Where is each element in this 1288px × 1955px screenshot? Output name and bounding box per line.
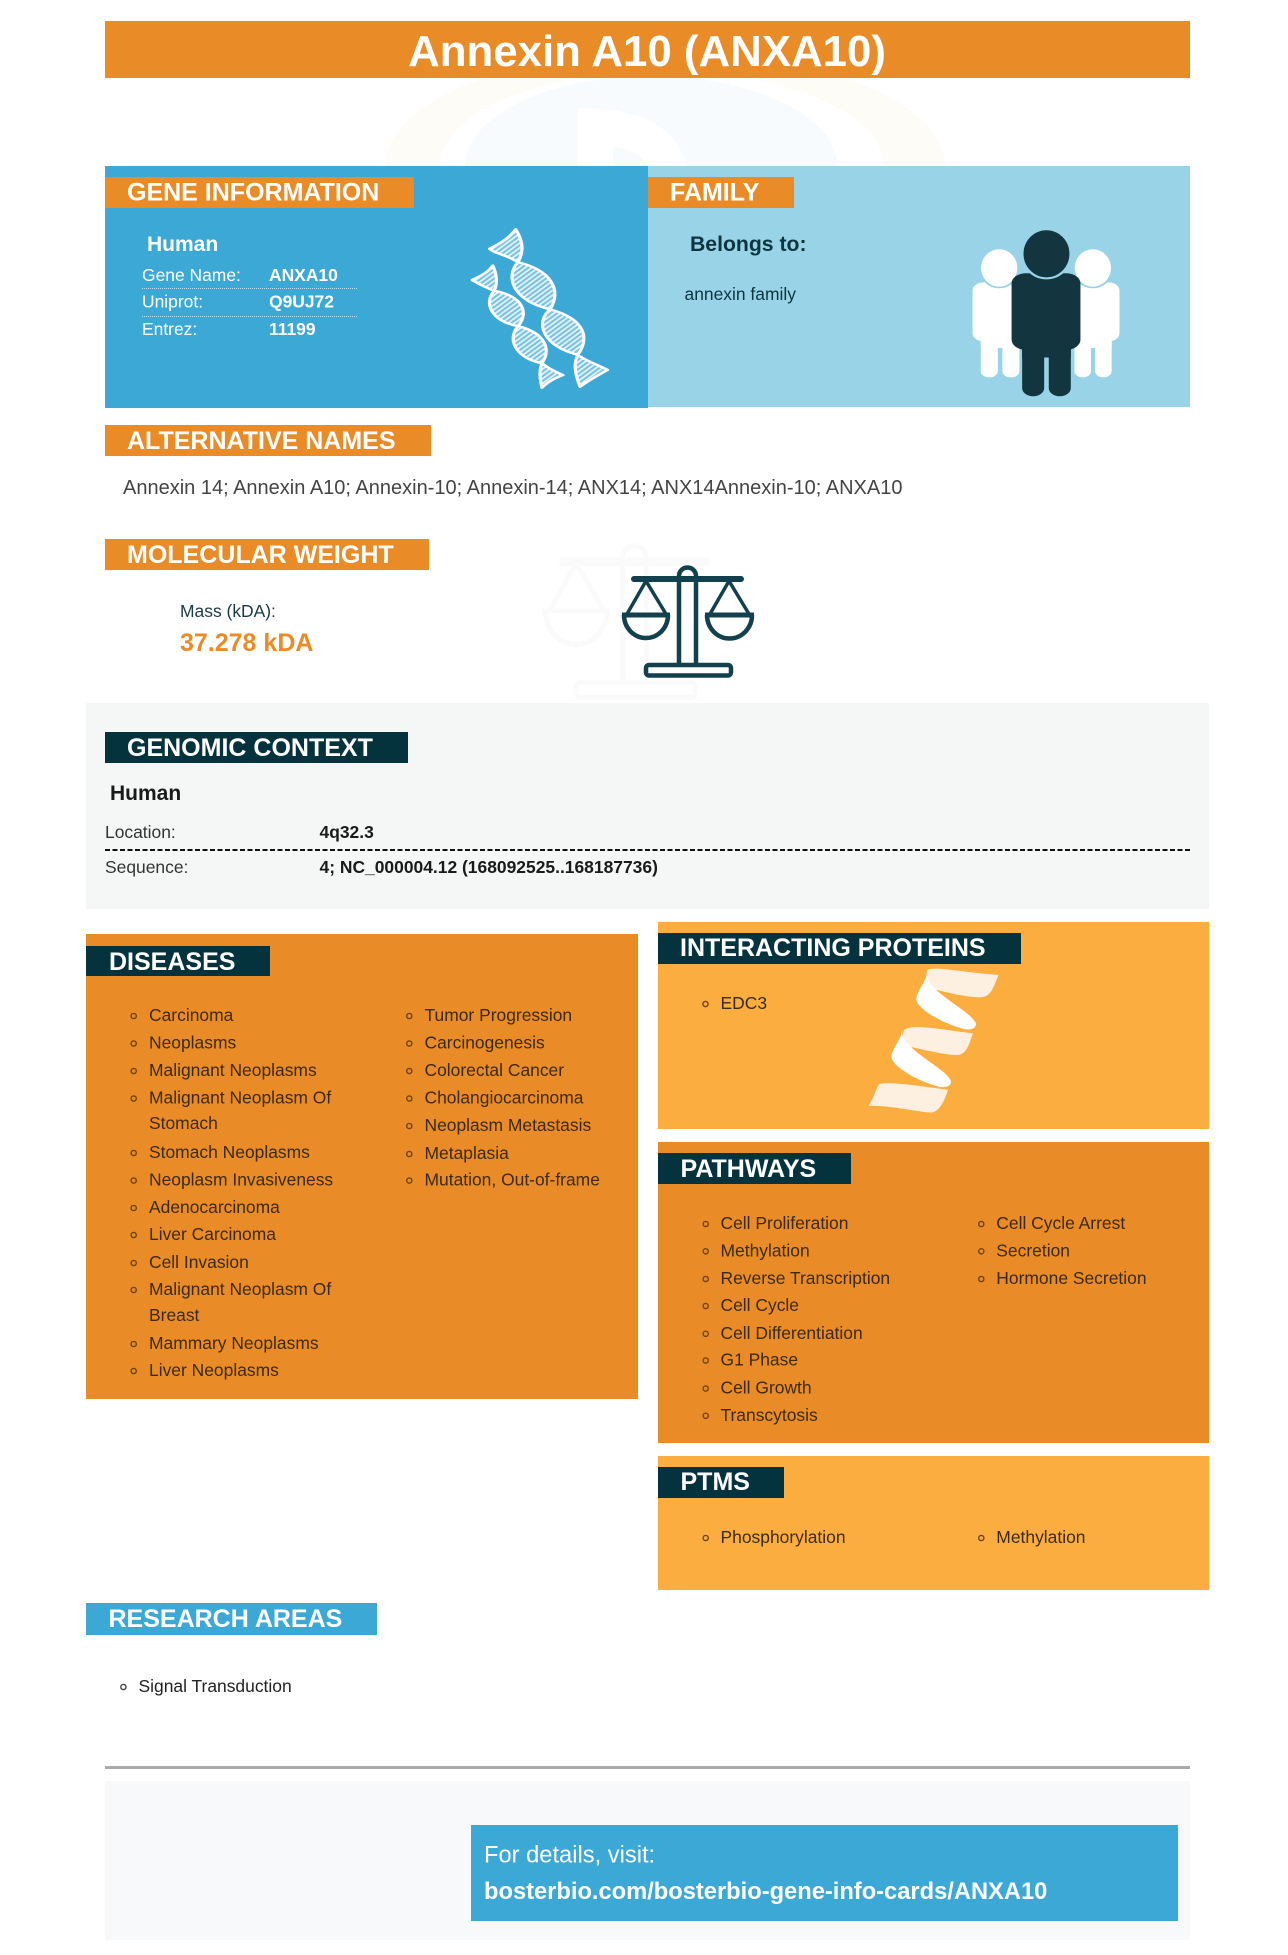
list: diseases column 1: Breast <box>149 1305 200 1325</box>
list: pathways column 1 <box>703 1213 890 1425</box>
panel: footer <box>105 1781 1190 1940</box>
heading: PTMs: PTMS <box>680 1468 750 1496</box>
heading: family <box>648 177 794 208</box>
panel: genomic context <box>86 703 1209 909</box>
gene information rows: Gene Name: <box>142 265 241 285</box>
gene information rows: Q9UJ72 <box>269 292 334 312</box>
list: diseases column 1 <box>131 1005 333 1380</box>
sequence row <box>105 857 658 877</box>
list: research areas: Signal Transduction <box>138 1676 292 1696</box>
list: diseases column 1: Carcinoma <box>149 1005 234 1025</box>
list: pathways column 1: Methylation <box>720 1240 810 1260</box>
location row: Location: <box>105 822 176 842</box>
heading: pathways: PATHWAYS <box>680 1155 816 1183</box>
panel: gene information <box>105 166 648 408</box>
list: pathways column 2: Secretion <box>996 1240 1070 1260</box>
list: diseases column 2 <box>407 1005 600 1190</box>
list: diseases column 2: Tumor Progression <box>424 1005 572 1025</box>
list: diseases column 2: Colorectal Cancer <box>424 1060 564 1080</box>
icon: group of people <box>973 229 1119 396</box>
panel: pathways <box>658 1142 1209 1443</box>
heading: diseases: DISEASES <box>109 948 235 976</box>
title banner <box>105 21 1190 78</box>
list: diseases column 1: Neoplasms <box>149 1032 237 1052</box>
list: pathways column 1: Reverse Transcription <box>720 1268 890 1288</box>
species label: Human <box>147 233 218 256</box>
mass label: Mass (kDA): <box>180 601 276 621</box>
gene information rows: ANXA10 <box>269 265 338 285</box>
callout: details link: For details, visit: <box>484 1842 655 1868</box>
gene information rows: Uniprot: <box>142 292 203 312</box>
list: diseases column 2: Carcinogenesis <box>424 1032 545 1052</box>
panel: family <box>648 166 1190 407</box>
list: pathways column 1: Transcytosis <box>720 1405 818 1425</box>
list: pathways column 1: Cell Differentiation <box>720 1323 863 1343</box>
list: diseases column 2: Mutation, Out-of-frame <box>424 1170 600 1190</box>
icon: protein ribbon <box>868 969 999 1113</box>
heading: family: FAMILY <box>670 178 760 206</box>
gene information rows: Entrez: <box>142 319 197 339</box>
list: pathways column 2 <box>979 1213 1147 1288</box>
heading: interacting proteins: INTERACTING PROTEINS <box>680 934 986 962</box>
list: diseases column 1: Cell Invasion <box>149 1252 249 1272</box>
panel: PTMs <box>658 1456 1209 1590</box>
icon: balance scale <box>622 568 754 676</box>
list: pathways column 1: G1 Phase <box>720 1350 798 1370</box>
icon: faint balance scale watermark <box>543 546 709 698</box>
alternative names text: Annexin 14; Annexin A10; Annexin-10; Annexin-14; ANX14; ANX14Annexin-10; ANXA10 <box>123 477 902 499</box>
list: diseases column 2: Neoplasm Metastasis <box>424 1115 591 1135</box>
list: PTMs column 1: Phosphorylation <box>720 1527 846 1547</box>
list: pathways column 1: Cell Growth <box>720 1378 812 1398</box>
list: diseases column 2: Metaplasia <box>424 1143 509 1163</box>
panel: diseases <box>86 934 638 1399</box>
list: diseases column 1: Malignant Neoplasm Of <box>149 1088 331 1108</box>
heading: diseases <box>86 946 270 976</box>
panel: interacting proteins <box>658 922 1209 1129</box>
gene information rows <box>142 265 357 339</box>
callout: details link <box>471 1825 1178 1921</box>
list: diseases column 1: Adenocarcinoma <box>149 1197 280 1217</box>
list: pathways column 1: Cell Cycle <box>720 1295 799 1315</box>
species label: Human <box>110 782 181 805</box>
list: diseases column 1: Stomach Neoplasms <box>149 1142 310 1162</box>
location row <box>105 822 374 842</box>
list: diseases column 1: Malignant Neoplasm Of <box>149 1279 331 1299</box>
list: diseases column 2: Cholangiocarcinoma <box>424 1088 584 1108</box>
heading: PTMs <box>658 1467 784 1498</box>
callout: details link: bosterbio.com/bosterbio-gene-info-cards/ANXA10 <box>484 1879 1047 1905</box>
gene information rows: 11199 <box>269 319 316 339</box>
list: diseases column 1: Malignant Neoplasms <box>149 1060 317 1080</box>
heading: genomic context: GENOMIC CONTEXT <box>127 734 373 762</box>
belongs to label: Belongs to: <box>690 233 807 256</box>
list: pathways column 2: Cell Cycle Arrest <box>996 1213 1125 1233</box>
heading: molecular weight: MOLECULAR WEIGHT <box>127 541 394 569</box>
icon: DNA double helix <box>472 229 608 388</box>
sequence row: Sequence: <box>105 857 188 877</box>
list: diseases column 1: Neoplasm Invasiveness <box>149 1170 333 1190</box>
location row: 4q32.3 <box>320 822 374 842</box>
family name: annexin family <box>684 284 796 304</box>
list: diseases column 1: Mammary Neoplasms <box>149 1333 319 1353</box>
heading: research areas: RESEARCH AREAS <box>108 1605 342 1633</box>
list: pathways column 2: Hormone Secretion <box>996 1268 1147 1288</box>
list: diseases column 1: Stomach <box>149 1113 218 1133</box>
list: PTMs column 2: Methylation <box>996 1527 1085 1547</box>
title banner: Annexin A10 (ANXA10) <box>408 27 886 76</box>
list: interacting proteins: EDC3 <box>720 993 767 1013</box>
list: diseases column 1: Liver Neoplasms <box>149 1360 279 1380</box>
list: pathways column 1: Cell Proliferation <box>720 1213 848 1233</box>
list: diseases column 1: Liver Carcinoma <box>149 1224 276 1244</box>
heading: alternative names: ALTERNATIVE NAMES <box>127 427 396 455</box>
background watermark logo <box>385 51 945 281</box>
heading: pathways <box>658 1153 851 1184</box>
heading: gene information: GENE INFORMATION <box>127 178 379 206</box>
mass value: 37.278 kDA <box>180 629 313 657</box>
sequence row: 4; NC_000004.12 (168092525..168187736) <box>320 857 658 877</box>
